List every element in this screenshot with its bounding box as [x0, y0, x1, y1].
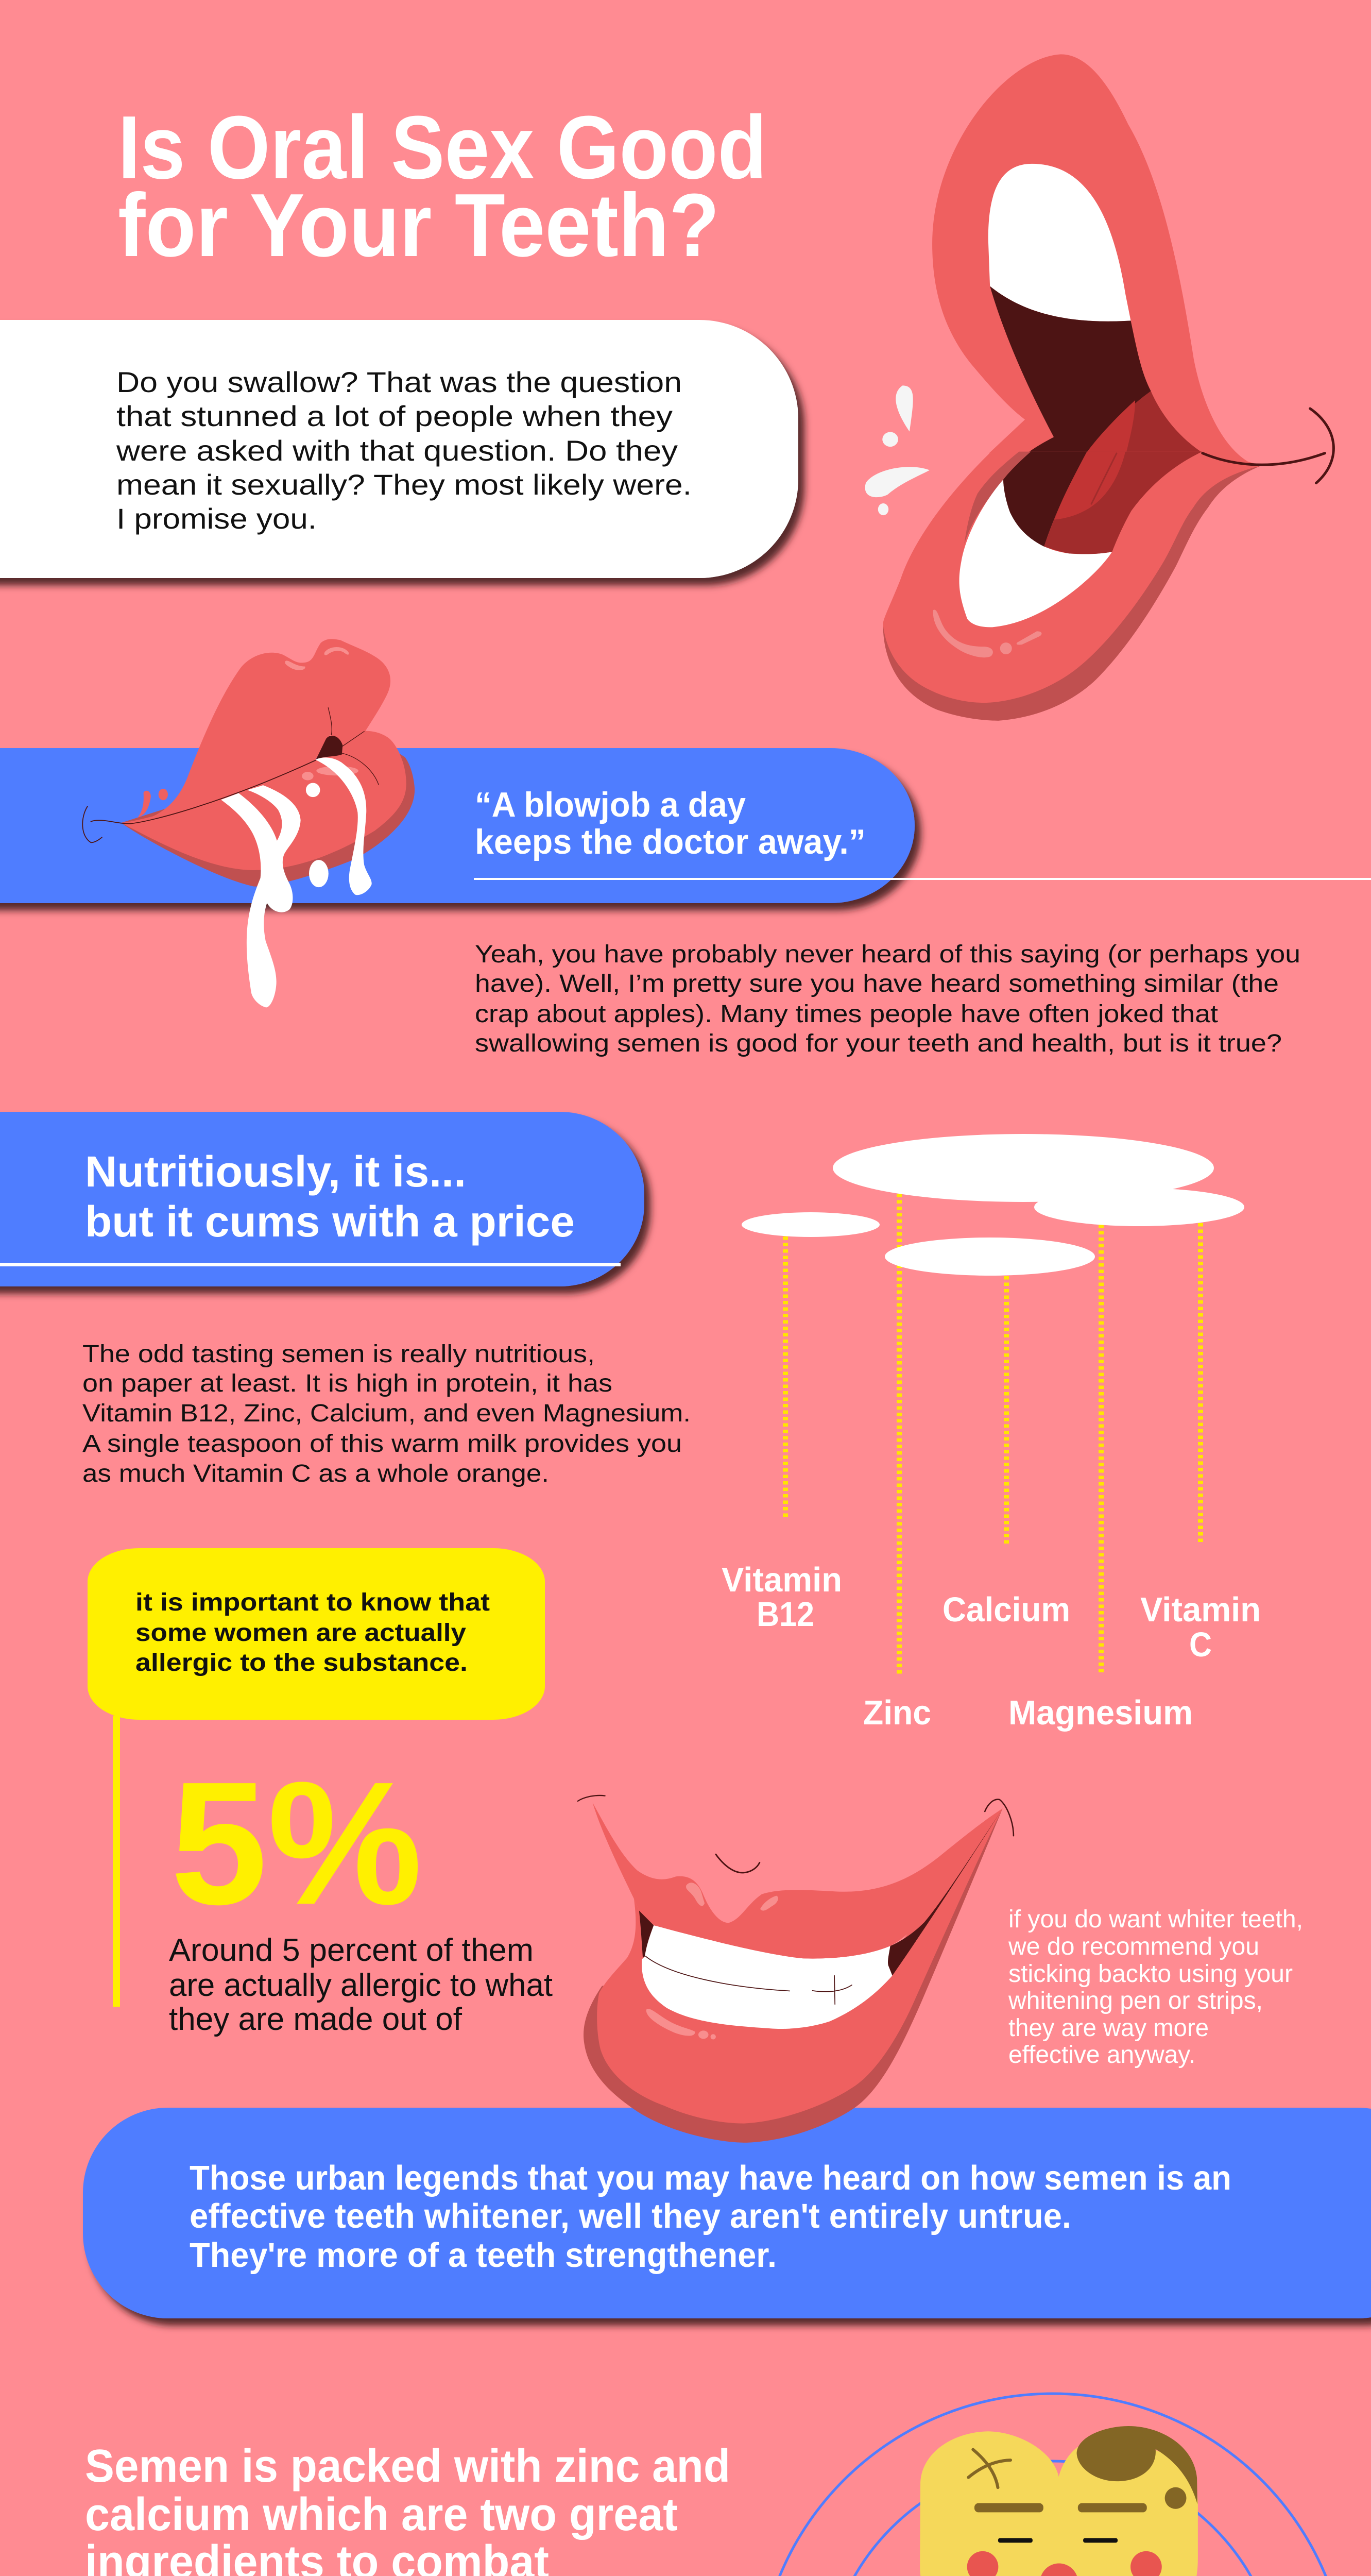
- nutrient labels: B12: [757, 1595, 814, 1634]
- tooth character: [920, 2426, 1198, 2576]
- text: whitening advice: whitening pen or strips,: [1008, 1987, 1263, 2014]
- quote text: “A blowjob a day: [475, 785, 746, 824]
- icon: splash drops: [865, 385, 930, 515]
- text: allergy stat description: Around 5 percent of them: [169, 1933, 534, 1968]
- text: saying explanation: swallowing semen is good for your teeth and health, but is it true?: [475, 1030, 1282, 1057]
- dotted drip lines: [785, 1194, 1201, 1675]
- nutrition panel background: [0, 1112, 644, 1286]
- illustration: rings and tooth: [757, 2394, 1348, 2576]
- nutrition heading: but it cums with a price: [85, 1197, 575, 1246]
- callout connector line: [113, 1716, 120, 2007]
- panel: nutritiously: [0, 1112, 644, 1286]
- legends text: [190, 2159, 1231, 2275]
- nutrition heading: [85, 1147, 575, 1246]
- text: nutrition body: A single teaspoon of this warm milk provides you: [82, 1430, 682, 1458]
- text: nutrition body: as much Vitamin C as a whole orange.: [82, 1460, 549, 1487]
- title: Is Oral Sex Good: [118, 97, 767, 197]
- intro text: I promise you.: [116, 502, 317, 535]
- heading: zinc and calcium: [85, 2441, 730, 2576]
- stat: 5%: 5%: [170, 1745, 422, 1941]
- title: [118, 97, 767, 275]
- text: saying explanation: [475, 941, 1300, 1057]
- nutrition heading: Nutritiously, it is...: [85, 1147, 466, 1196]
- text: allergy stat description: they are made out of: [169, 2002, 462, 2037]
- callout text: it is important to know that: [135, 1589, 490, 1616]
- blue rings: [757, 2394, 1348, 2576]
- callout text: allergic to the substance.: [135, 1649, 468, 1676]
- callout text: some women are actually: [135, 1619, 466, 1647]
- legends panel background: [83, 2108, 1371, 2318]
- quote panel background: [0, 748, 915, 903]
- blue circle: [888, 2524, 1218, 2576]
- illustration: open mouth: [883, 54, 1333, 721]
- text: whitening advice: they are way more: [1008, 2014, 1209, 2042]
- nutrient labels: Magnesium: [1008, 1693, 1193, 1732]
- illustration: dripping lips: [82, 639, 415, 1007]
- quote text: [475, 785, 866, 861]
- legends text: They're more of a teeth strengthener.: [190, 2236, 777, 2275]
- nutrient labels: [722, 1561, 1261, 1732]
- nutrient labels: Vitamin: [722, 1561, 842, 1599]
- legends text: Those urban legends that you may have heard on how semen is an: [190, 2159, 1231, 2197]
- chart: nutrient drips: [722, 1134, 1261, 1732]
- intro text: mean it sexually? They most likely were.: [116, 468, 692, 501]
- nutrition divider line: [0, 1263, 621, 1266]
- panel: intro question: [0, 320, 798, 578]
- text: allergy stat description: [169, 1933, 553, 2037]
- panel: blowjob quote: [0, 748, 915, 903]
- text: nutrition body: [82, 1341, 691, 1487]
- intro text: Do you swallow? That was the question: [116, 366, 682, 398]
- quote text: keeps the doctor away.”: [475, 822, 866, 861]
- text: whitening advice: if you do want whiter teeth,: [1008, 1906, 1303, 1933]
- clouds: [742, 1134, 1244, 1276]
- heading: zinc and calcium: Semen is packed with zinc and: [85, 2441, 730, 2492]
- panel: urban legends: [83, 2108, 1371, 2318]
- callout box: [88, 1548, 545, 1720]
- intro text: were asked with that question. Do they: [116, 434, 678, 467]
- text: allergy stat description: are actually allergic to what: [169, 1968, 553, 2003]
- text: whitening advice: we do recommend you: [1008, 1933, 1259, 1960]
- panel: allergy callout: [88, 1548, 545, 2007]
- quote divider line: [474, 878, 1371, 880]
- nutrient labels: Zinc: [863, 1693, 931, 1732]
- nutrient labels: Calcium: [942, 1590, 1070, 1629]
- text: nutrition body: Vitamin B12, Zinc, Calcium, and even Magnesium.: [82, 1400, 691, 1427]
- text: whitening advice: [1008, 1906, 1303, 2069]
- text: whitening advice: sticking backto using your: [1008, 1960, 1293, 1988]
- intro text: that stunned a lot of people when they: [116, 400, 673, 432]
- illustration: smile: [578, 1795, 1014, 2143]
- intro text: [116, 366, 692, 535]
- text: saying explanation: Yeah, you have probably never heard of this saying (or perhaps you: [475, 941, 1300, 968]
- text: whitening advice: effective anyway.: [1008, 2041, 1195, 2069]
- heading: zinc and calcium: calcium which are two great: [85, 2489, 678, 2540]
- callout text: [135, 1589, 490, 1676]
- text: saying explanation: have). Well, I’m pretty sure you have heard something similar (the: [475, 970, 1279, 997]
- intro panel background: [0, 320, 798, 578]
- text: saying explanation: crap about apples). Many times people have often joked that: [475, 1001, 1218, 1028]
- text: nutrition body: The odd tasting semen is really nutritious,: [82, 1341, 595, 1368]
- legends text: effective teeth whitener, well they aren't entirely untrue.: [190, 2197, 1071, 2235]
- title: for Your Teeth?: [118, 175, 719, 275]
- nutrient labels: C: [1189, 1625, 1212, 1664]
- text: nutrition body: on paper at least. It is high in protein, it has: [82, 1370, 612, 1397]
- nutrient labels: Vitamin: [1140, 1590, 1261, 1629]
